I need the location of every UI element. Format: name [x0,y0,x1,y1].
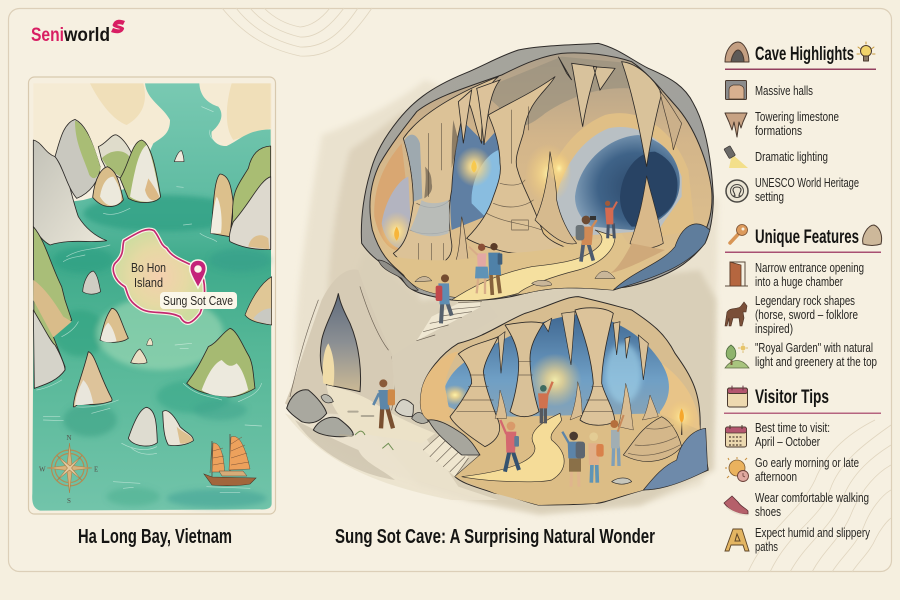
cave entrance arch [320,293,361,392]
lower rocks [100,308,128,342]
heading: Visitor Tips [755,387,829,408]
icon: light bulb [857,42,875,61]
logo: Seniworld [31,20,125,46]
compass rose: W [39,466,46,474]
item: towering limestone formations [725,109,839,138]
compass rose [39,434,98,505]
item: shoes: Wear comfortable walking [755,490,869,505]
item: towering limestone formations: Towering limestone [755,109,839,124]
compass rose: N [66,434,72,442]
rear hills [98,135,132,180]
icon: map pin [190,260,206,288]
person in red pointing [605,201,617,238]
heading: Unique Features [755,227,859,248]
item: go early: Go early morning or late [755,455,859,470]
land wash top [33,83,272,160]
item: best time: Best time to visit: [755,420,830,435]
lower stairs [423,433,468,477]
map card [28,77,276,514]
visitors in lower chamber [373,379,624,487]
grey rock left [378,260,418,290]
item: legendary rock shapes: inspired) [755,321,793,336]
left grey rocks [33,140,107,245]
blue rock [613,224,710,290]
large left column [393,77,498,267]
item: dramatic lighting [724,146,828,168]
panel: Ha Long Bay map [28,77,276,514]
blonde visitor [588,432,604,483]
item: UNESCO World Heritage [726,175,859,204]
water [32,83,272,511]
icon: rock [863,225,882,246]
floor [393,233,652,298]
panel: Unique Features [725,224,882,369]
item: legendary rock shapes: (horse, sword – folklore [755,307,858,322]
ripples [37,107,262,493]
item: massive halls [726,80,813,100]
stalactites [558,57,615,127]
item: royal garden [725,340,877,369]
stacked rock right [623,417,682,461]
right small column [535,152,577,244]
photographer with backpack [576,216,597,262]
entrance rock [285,269,395,417]
item: go early: afternoon [755,469,797,484]
columns [450,337,500,447]
panel: cave cross-section [285,43,718,514]
logo: Seniworld: Seni [31,25,64,46]
item: humid paths [725,525,870,554]
small rock [83,271,101,294]
person lifting torch [538,382,553,423]
glowing path [452,230,615,301]
item: best time [726,420,830,449]
central column [467,77,572,254]
heading: Cave Highlights [755,44,854,65]
left lower green rock [33,227,72,388]
right tan rock [211,174,233,237]
icon: cave [725,42,749,62]
item: narrow entrance: into a huge chamber [755,274,843,289]
walker with orange pack [373,379,395,428]
panel: Cave Highlights [724,42,876,204]
left wall band [420,352,458,422]
cavity [370,53,712,298]
floor [448,413,708,505]
photographer [562,432,585,487]
blue rock [643,428,708,490]
pink shirt visitor [500,420,519,472]
compass rose: S [67,497,71,505]
item: towering limestone formations: formations [755,123,802,138]
left blue alcove [450,117,501,230]
item: shoes [724,490,869,519]
item: dramatic lighting: Dramatic lighting [755,149,828,164]
hiker on stairs [436,274,452,323]
stalagmites [495,382,658,430]
stalagmite [630,176,663,248]
item: humid paths: paths [755,539,778,554]
rock mass wash [295,80,718,514]
cave label: Sung Sot Cave [163,293,233,308]
island label: Island [134,275,163,290]
compass rose: E [94,466,98,474]
logo: Seniworld: world [63,25,110,46]
island label: Bo Hon [131,260,166,275]
tan rock [93,167,123,207]
item: shoes: shoes [755,504,781,519]
grey rock left [428,420,480,455]
left alcove [374,143,412,251]
upper stairs [417,302,482,341]
panel: Visitor Tips [724,386,881,554]
right wall band [660,363,700,437]
island Bo Hon [113,229,205,323]
woman raising arm [610,415,624,466]
item: best time: April – October [755,434,821,449]
item: legendary rock shapes [725,293,858,336]
chamber rim [361,43,713,301]
item: legendary rock shapes: Legendary rock shapes [755,293,855,308]
blue back wall [445,313,670,423]
item: narrow entrance: Narrow entrance opening [755,260,864,275]
island label [131,260,166,290]
ground path [327,385,435,443]
torch [680,413,684,435]
junk boat [204,434,256,486]
ceiling shade [472,57,662,126]
caption: Ha Long Bay: Ha Long Bay, Vietnam [78,526,232,548]
small islet [174,151,184,162]
warm arch bands [538,113,695,237]
green and white rock [120,140,161,203]
item: go early [725,455,859,484]
ground wash [285,413,498,500]
icon: key [730,224,748,243]
upper chamber [361,43,713,301]
item: massive halls: Massive halls [755,83,813,98]
item: UNESCO World Heritage: UNESCO World Heritage [755,175,859,190]
stalactites [498,312,648,380]
right green and grey rock [229,146,271,249]
item: UNESCO World Heritage: setting [755,189,784,204]
chamber rim [420,297,708,505]
item: narrow entrance [725,260,864,289]
icon: calendar [728,386,748,407]
caption: Sung Sot Cave: Sung Sot Cave: A Surprising Natural Wonder [335,526,655,548]
glowing path [462,413,564,482]
couple [469,243,502,295]
right edge rock [245,277,272,325]
lower chamber [420,297,708,505]
tunnel [575,135,680,230]
boulders [287,390,327,423]
